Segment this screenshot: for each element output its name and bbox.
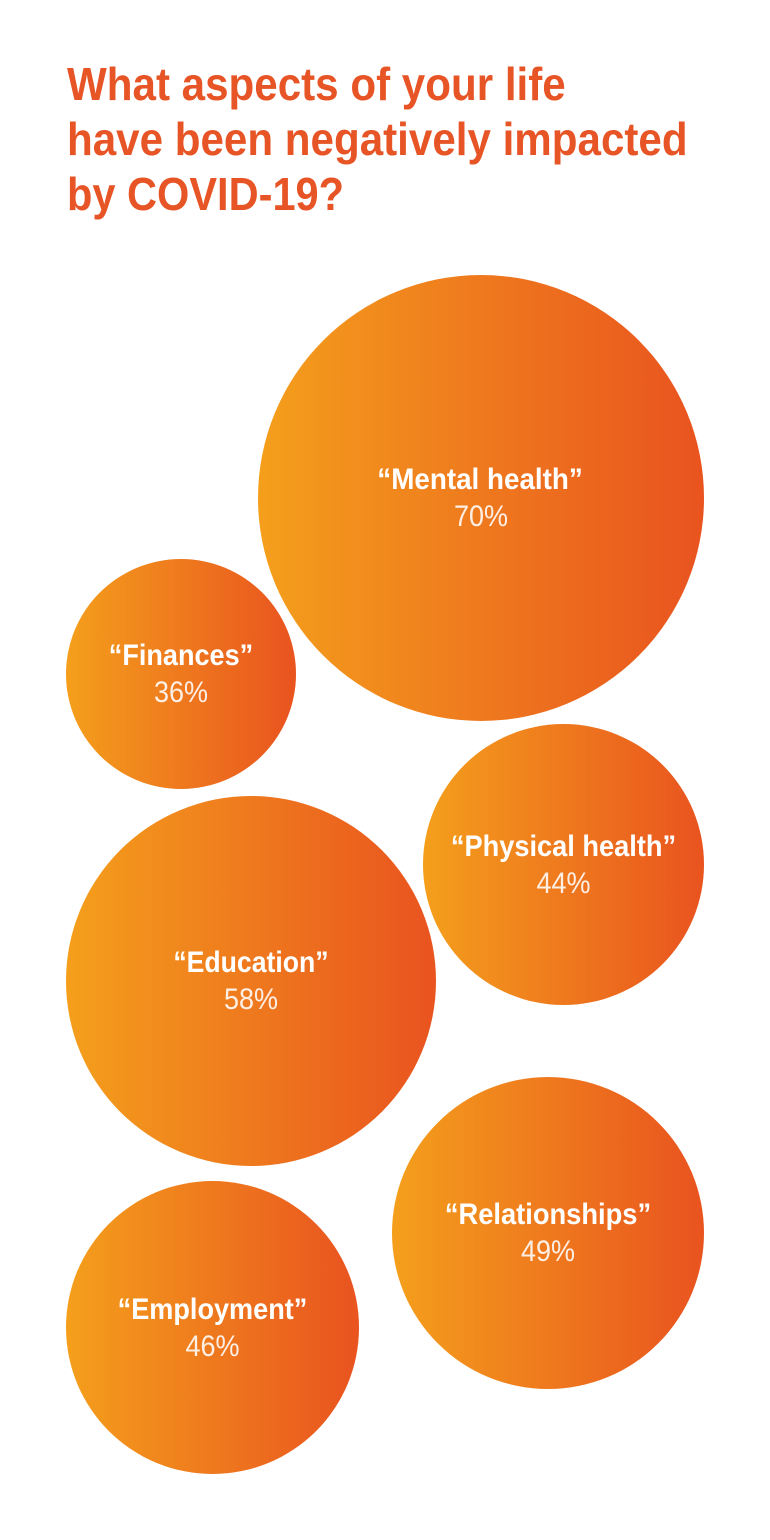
bubble: relationships 49%	[392, 1077, 704, 1389]
title: by COVID-19?	[67, 168, 344, 220]
label: relationships	[445, 1198, 651, 1268]
label: mental health: “Mental health”	[377, 463, 583, 496]
label: relationships: “Relationships”	[445, 1198, 651, 1231]
label: physical health: 44%	[536, 867, 591, 900]
label: education: 58%	[224, 983, 278, 1016]
label: employment: 46%	[185, 1330, 240, 1363]
label: employment	[118, 1293, 307, 1363]
label: education	[173, 946, 329, 1016]
label: mental health	[377, 463, 583, 533]
label: finances: 36%	[154, 676, 208, 709]
label: physical health: “Physical health”	[451, 830, 676, 863]
label: finances: “Finances”	[109, 639, 253, 672]
title: What aspects of your life	[67, 58, 566, 110]
label: relationships: 49%	[521, 1235, 575, 1268]
title: have been negatively impacted	[67, 113, 688, 165]
label: finances	[109, 639, 253, 709]
bubble: physical health 44%	[423, 724, 704, 1005]
label: mental health: 70%	[454, 500, 508, 533]
label: physical health	[451, 830, 676, 900]
bubble: employment 46%	[66, 1181, 359, 1474]
bubble: mental health 70%	[258, 275, 704, 721]
label: employment: “Employment”	[118, 1293, 307, 1326]
bubble: finances 36%	[66, 559, 296, 789]
bubble: education 58%	[66, 796, 436, 1166]
label: education: “Education”	[173, 946, 329, 979]
title	[67, 58, 688, 220]
